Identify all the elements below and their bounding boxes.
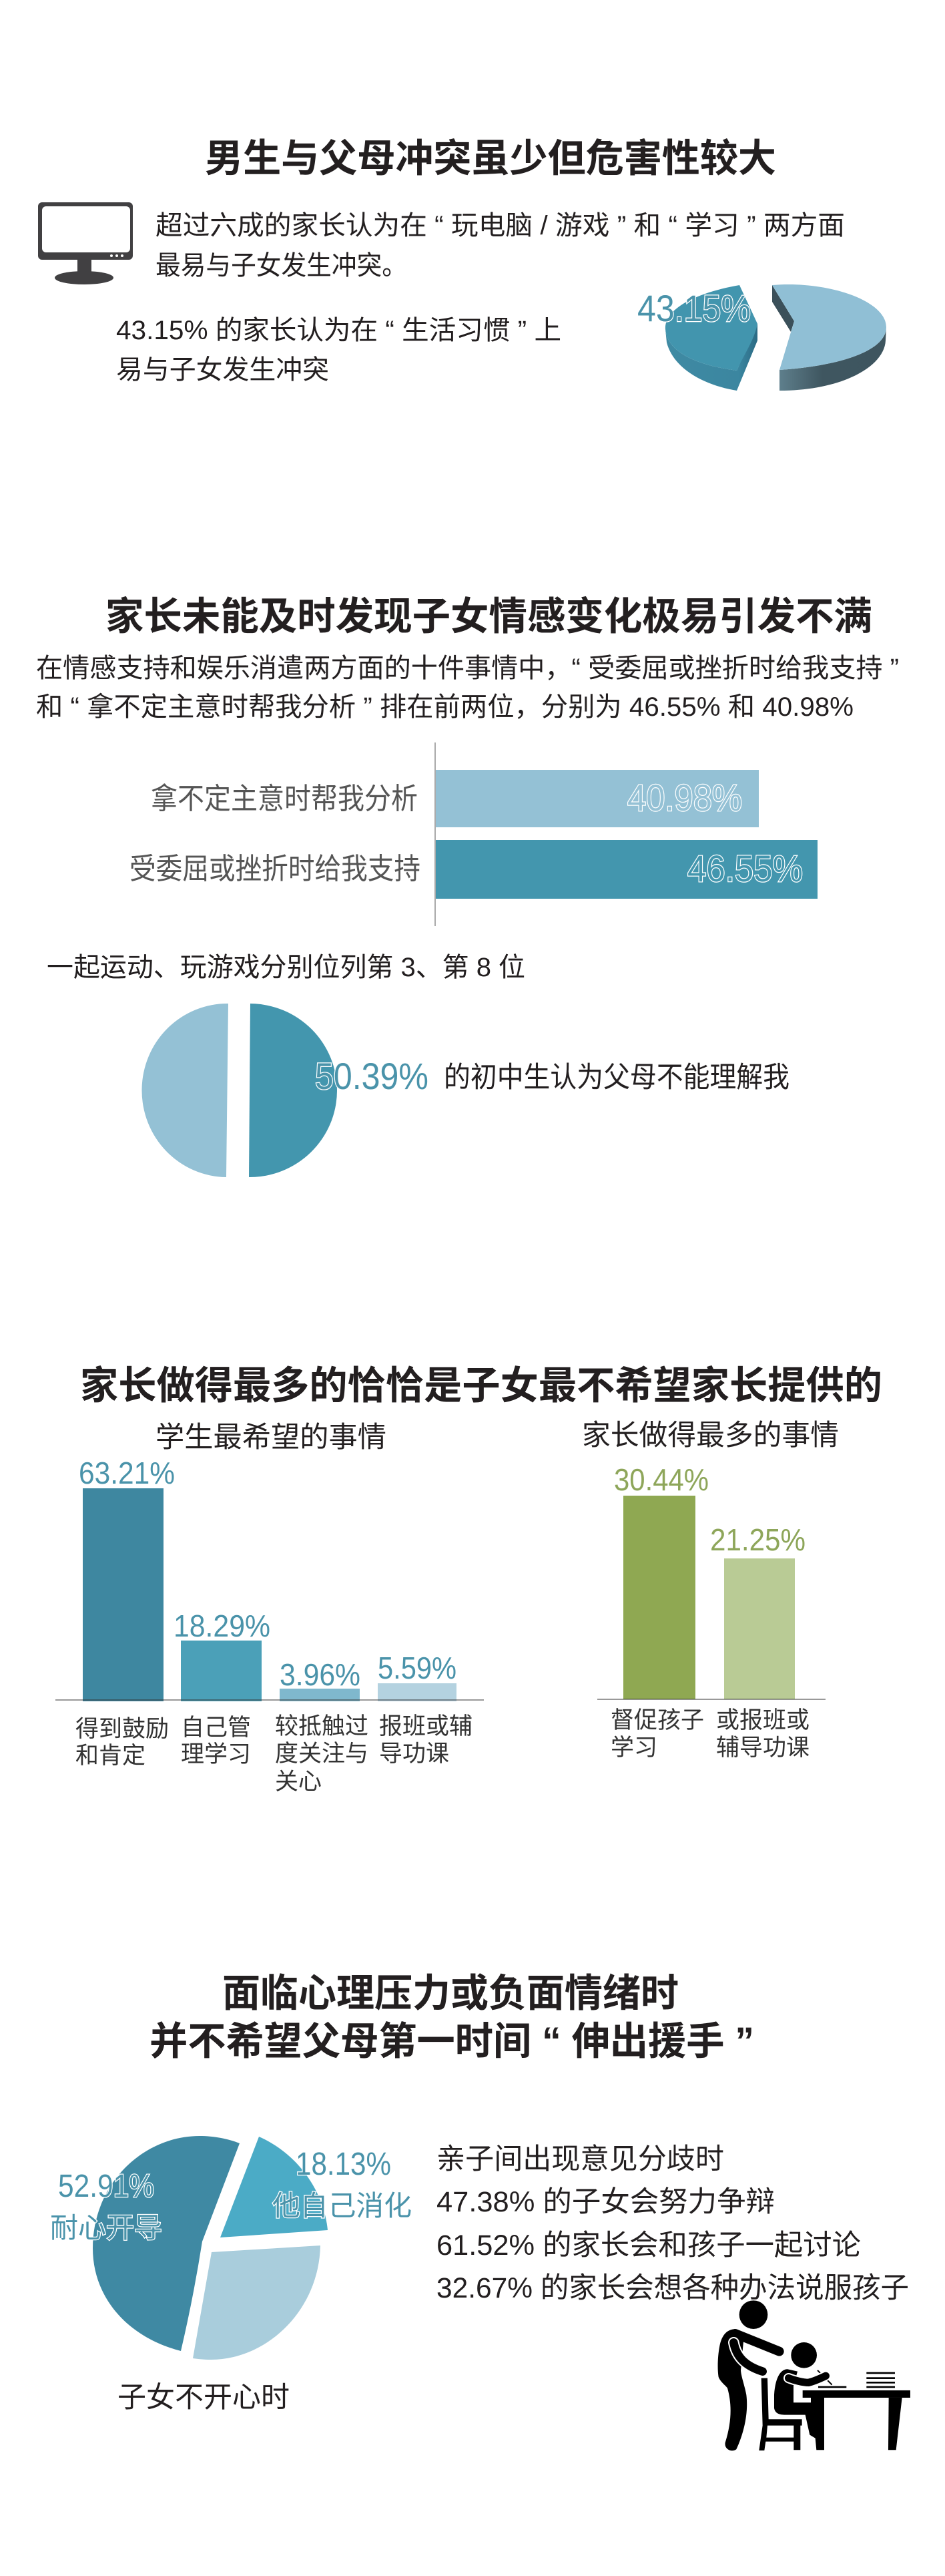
axis label: urge study: 学习 xyxy=(611,1735,657,1761)
axis label: tutoring xyxy=(379,1713,472,1767)
pie slice: remainder side xyxy=(779,327,886,391)
chart heading: students: 学生最希望的事情 xyxy=(155,1422,386,1454)
axis label: resist over attention: 度关注与 xyxy=(275,1741,368,1767)
pie caption: 子女不开心时 xyxy=(117,2382,290,2414)
title: section 4 xyxy=(149,1972,754,2063)
icon: parent tutoring child xyxy=(718,2300,910,2450)
axis label: encouragement: 得到鼓励 xyxy=(75,1716,169,1742)
text block: disagreement stats: 47.38% 的子女会努力争辩 xyxy=(436,2186,775,2218)
chart: exploded pie xyxy=(50,2136,412,2360)
axis label: self management xyxy=(181,1715,251,1767)
axis label: tutoring: 报班或辅 xyxy=(379,1713,472,1739)
pie label: 52.91%: 52.91% xyxy=(58,2169,154,2204)
text block: top two items: 在情感支持和娱乐消遣两方面的十件事情中，“ 受委屈或挫折时给我支持 ” xyxy=(36,654,899,683)
bar value: 46.55%: 46.55% xyxy=(687,847,803,889)
text block: parents do not understand: 的初中生认为父母不能理解我 xyxy=(444,1062,790,1094)
bar: 3.96% xyxy=(280,1689,360,1701)
text block: disagreement stats: 亲子间出现意见分歧时 xyxy=(436,2143,724,2175)
text block: top two items xyxy=(36,654,899,722)
value: 3.96%: 3.96% xyxy=(280,1657,360,1692)
pie slice: remainder top xyxy=(772,284,886,370)
text block: living habits conflict xyxy=(116,316,561,385)
axis label: tutoring classes: 或报班或 xyxy=(716,1707,810,1733)
panel: section 4 psychological pressure xyxy=(50,1972,910,2450)
text block: sports and games rank: 一起运动、玩游戏分别位列第 3、第 8 位 xyxy=(47,953,525,982)
chart: split pie 50.39% xyxy=(141,1004,428,1177)
pie label: 43.15% xyxy=(637,287,751,329)
panel: section 1 parent conflict xyxy=(38,137,886,391)
bar: 21.25% xyxy=(724,1558,795,1699)
chart: 3D pie 43.15% xyxy=(637,284,886,391)
title: section 3: 家长做得最多的恰恰是子女最不希望家长提供的 xyxy=(80,1364,882,1408)
text block: living habits conflict: 易与子女发生冲突 xyxy=(116,355,329,385)
chart: horizontal bars xyxy=(129,742,818,926)
text block: computer and study conflict xyxy=(155,211,845,280)
bar: 40.98% xyxy=(436,770,759,827)
axis label: self management: 理学习 xyxy=(181,1741,251,1767)
title: section 4: 并不希望父母第一时间 “ 伸出援手 ” xyxy=(149,2020,754,2063)
pie label: 50.39%: 50.39% xyxy=(315,1055,428,1097)
pie slice: 50.39% xyxy=(249,1004,337,1177)
text block: top two items: 和 “ 拿不定主意时帮我分析 ” 排在前两位，分别为 46.55% 和 40.98% xyxy=(36,692,854,722)
value: 21.25%: 21.25% xyxy=(710,1522,806,1557)
pie slice: remainder xyxy=(141,1004,228,1177)
title: section 2: 家长未能及时发现子女情感变化极易引发不满 xyxy=(105,595,872,638)
pie label: digest by self: 他自己消化 xyxy=(272,2190,412,2221)
icon: computer monitor xyxy=(38,202,133,284)
bar: 63.21% xyxy=(83,1488,164,1701)
text block: computer and study conflict: 最易与子女发生冲突。 xyxy=(155,251,407,280)
text block: disagreement stats: 61.52% 的家长会和孩子一起讨论 xyxy=(436,2229,861,2262)
text block: living habits conflict: 43.15% 的家长认为在 “ 生活习惯 ” 上 xyxy=(116,316,561,345)
value: 63.21%: 63.21% xyxy=(79,1456,175,1490)
axis label: resist over attention: 较抵触过 xyxy=(275,1713,368,1739)
bar: 30.44% xyxy=(623,1496,695,1699)
pie slice: 43.15% side xyxy=(665,324,757,391)
pie slice: remainder xyxy=(193,2245,320,2360)
axis label: tutoring classes xyxy=(716,1707,810,1761)
axis label: urge study xyxy=(611,1707,704,1761)
pie label: 18.13%: 18.13% xyxy=(296,2147,391,2182)
title: section 1: 男生与父母冲突虽少但危害性较大 xyxy=(205,137,776,180)
axis label: resist over attention xyxy=(275,1713,368,1795)
bar label: support when wronged: 受委屈或挫折时给我支持 xyxy=(129,853,420,885)
text block: computer and study conflict: 超过六成的家长认为在 “ 玩电脑 / 游戏 ” 和 “ 学习 ” 两方面 xyxy=(155,211,845,240)
value: 30.44%: 30.44% xyxy=(614,1462,709,1497)
chart heading: parents: 家长做得最多的事情 xyxy=(582,1420,839,1452)
pie slice: 18.13% xyxy=(220,2137,328,2237)
text block: disagreement stats xyxy=(436,2143,909,2304)
bar label: analyze decisions: 拿不定主意时帮我分析 xyxy=(151,783,418,815)
pie slice: 43.15% top xyxy=(665,285,757,371)
value: 18.29%: 18.29% xyxy=(174,1608,270,1643)
axis label: tutoring: 导功课 xyxy=(379,1741,449,1767)
axis label: encouragement xyxy=(75,1716,169,1769)
pie label: patient guidance: 耐心开导 xyxy=(50,2212,162,2243)
chart: students bar chart xyxy=(55,1456,484,1795)
axis label: encouragement: 和肯定 xyxy=(75,1743,145,1769)
bar: 18.29% xyxy=(181,1641,262,1701)
pie slice: 52.91% xyxy=(93,2136,240,2351)
panel: section 2 emotional change xyxy=(36,595,899,1177)
value: 5.59%: 5.59% xyxy=(378,1651,456,1685)
panel: section 3 what parents do most xyxy=(55,1364,882,1795)
chart: parents bar chart xyxy=(597,1462,826,1761)
bar: 46.55% xyxy=(436,840,818,899)
axis label: urge study: 督促孩子 xyxy=(611,1707,704,1733)
axis label: tutoring classes: 辅导功课 xyxy=(716,1735,810,1761)
pie slice: remainder inner wall xyxy=(772,285,794,332)
axis label: self management: 自己管 xyxy=(181,1715,251,1741)
title: section 4: 面临心理压力或负面情绪时 xyxy=(222,1972,679,2015)
text block: disagreement stats: 32.67% 的家长会想各种办法说服孩子 xyxy=(436,2272,909,2304)
bar value: 40.98%: 40.98% xyxy=(627,777,742,819)
bar: 5.59% xyxy=(378,1683,456,1701)
axis label: resist over attention: 关心 xyxy=(275,1769,322,1795)
